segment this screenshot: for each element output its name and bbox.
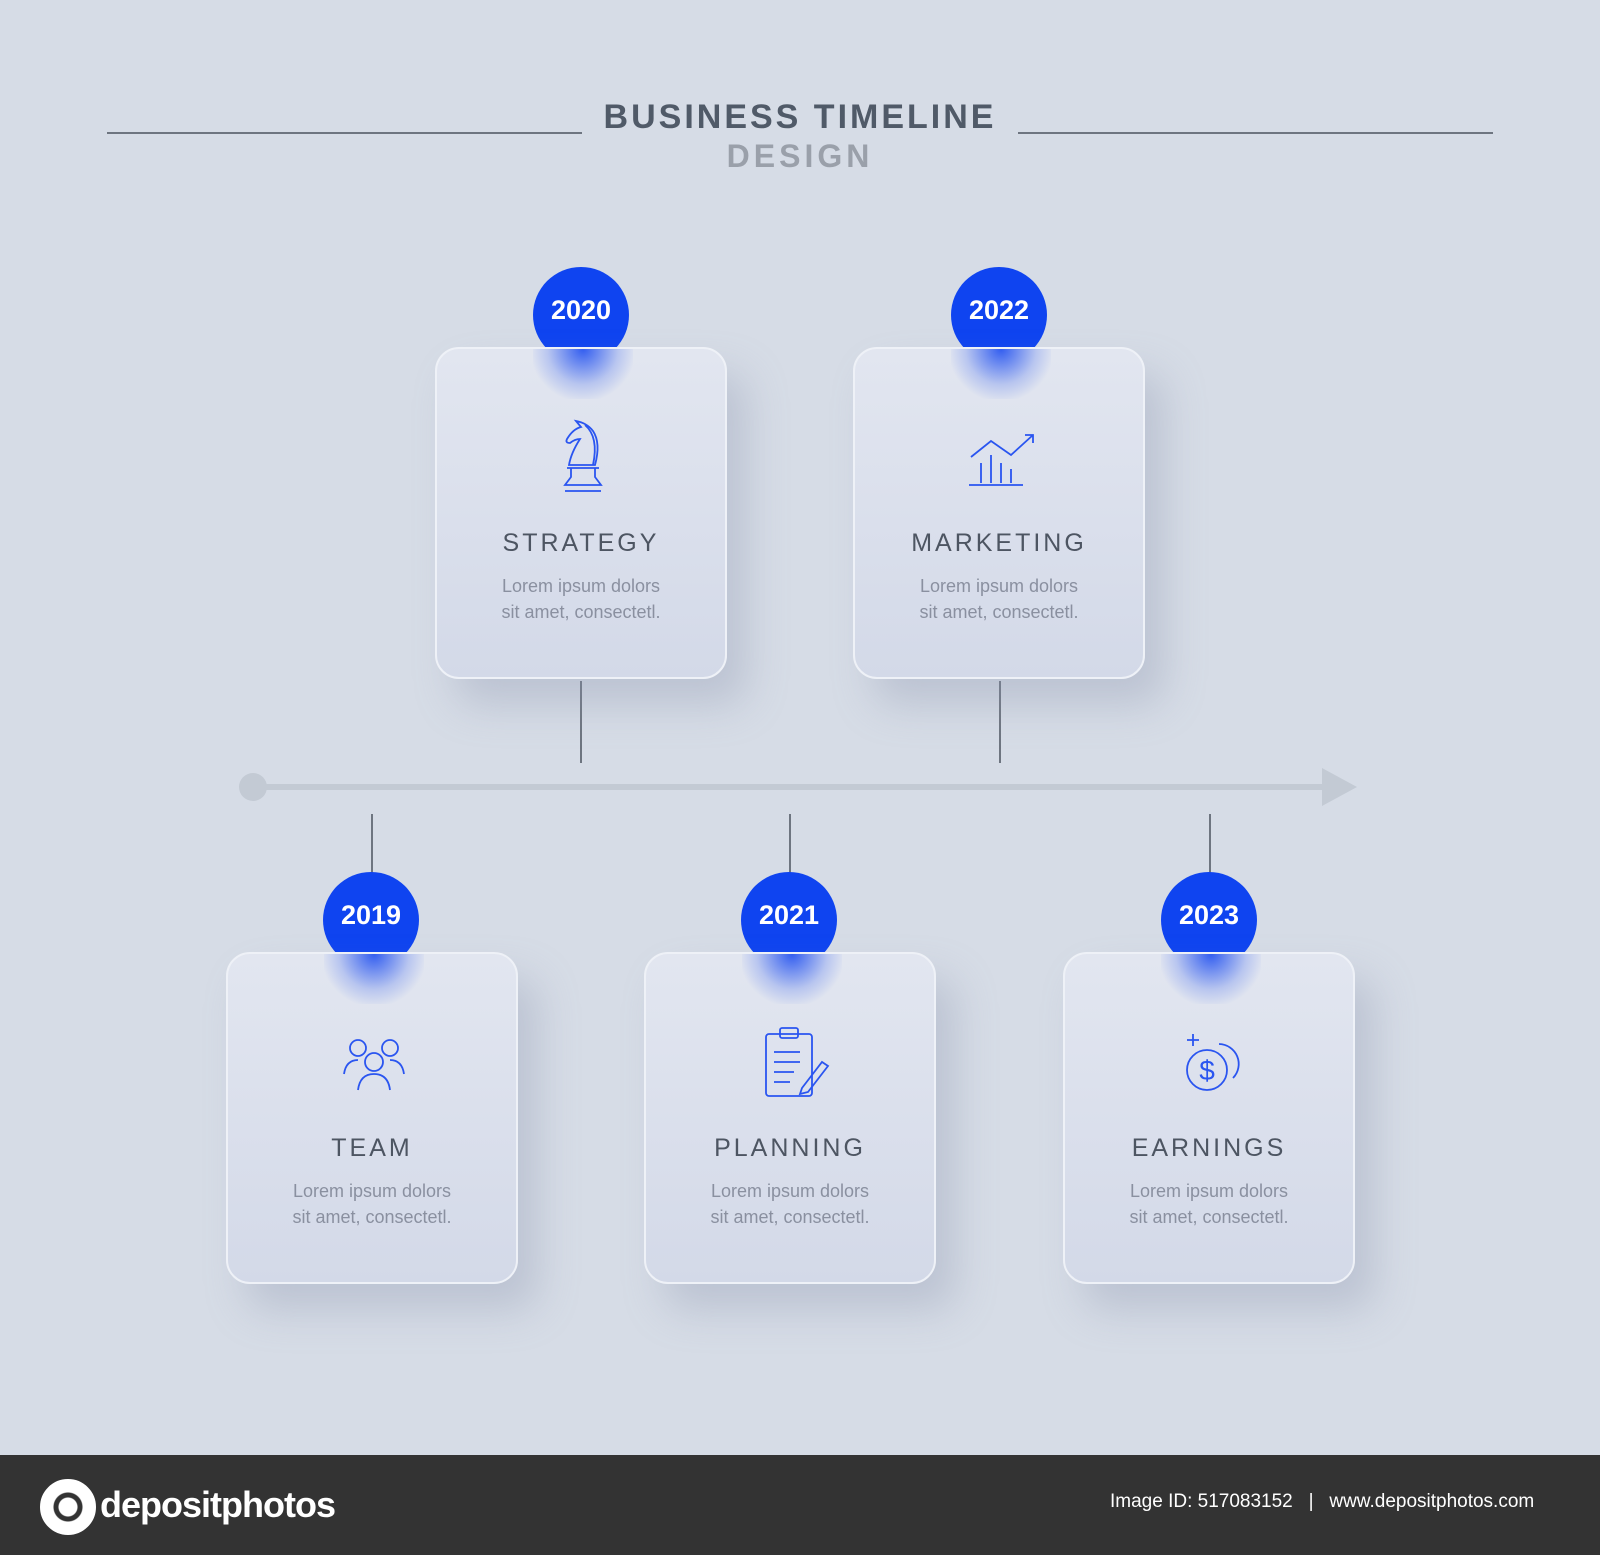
card: marketing: sit amet, consectetl.: [919, 602, 1079, 622]
timeline arrow: [239, 768, 1356, 806]
card: marketing: MARKETING: [911, 529, 1087, 557]
card: team: [226, 952, 518, 1284]
circle 2020: 2020: [551, 295, 611, 325]
card: team: sit amet, consectetl.: [292, 1207, 452, 1227]
card: earnings: Lorem ipsum dolors: [1130, 1181, 1288, 1201]
card: earnings: [1063, 952, 1355, 1284]
footer logo: [40, 1479, 335, 1535]
circle 2019: 2019: [341, 900, 401, 930]
card: strategy: STRATEGY: [503, 529, 659, 557]
footer logo: depositphotos: [100, 1484, 335, 1525]
icon: chart: [969, 434, 1034, 486]
circle 2020: [533, 267, 629, 363]
circle 2019: [323, 872, 419, 968]
icon: clipboard: [765, 1027, 830, 1097]
card: strategy: [435, 347, 727, 679]
circle 2022: 2022: [969, 295, 1029, 325]
card: marketing: Lorem ipsum dolors: [920, 576, 1078, 596]
card: marketing: [853, 347, 1145, 679]
icon: team: [343, 1039, 405, 1090]
card: planning: PLANNING: [714, 1134, 866, 1162]
circle 2023: 2023: [1179, 900, 1239, 930]
card: planning: sit amet, consectetl.: [710, 1207, 870, 1227]
title: DESIGN: [727, 138, 873, 174]
card: planning: [644, 952, 936, 1284]
card: earnings: sit amet, consectetl.: [1129, 1207, 1289, 1227]
circle 2021: 2021: [759, 900, 819, 930]
card: strategy: sit amet, consectetl.: [501, 602, 661, 622]
circle 2023: [1161, 872, 1257, 968]
icon: coins: $: [1199, 1055, 1215, 1086]
footer bar: [0, 1455, 1600, 1555]
footer id: Image ID: 517083152 | www.depositphotos.com: [1110, 1491, 1534, 1512]
icon: knight: [563, 420, 603, 492]
circle 2021: [741, 872, 837, 968]
card: planning: Lorem ipsum dolors: [711, 1181, 869, 1201]
circle 2022: [951, 267, 1047, 363]
card: team: Lorem ipsum dolors: [293, 1181, 451, 1201]
card: strategy: Lorem ipsum dolors: [502, 576, 660, 596]
title: [604, 98, 996, 174]
card: team: TEAM: [331, 1134, 413, 1162]
card: earnings: EARNINGS: [1132, 1134, 1286, 1162]
title: BUSINESS TIMELINE: [604, 98, 996, 136]
icon: coins: [1186, 1034, 1240, 1091]
